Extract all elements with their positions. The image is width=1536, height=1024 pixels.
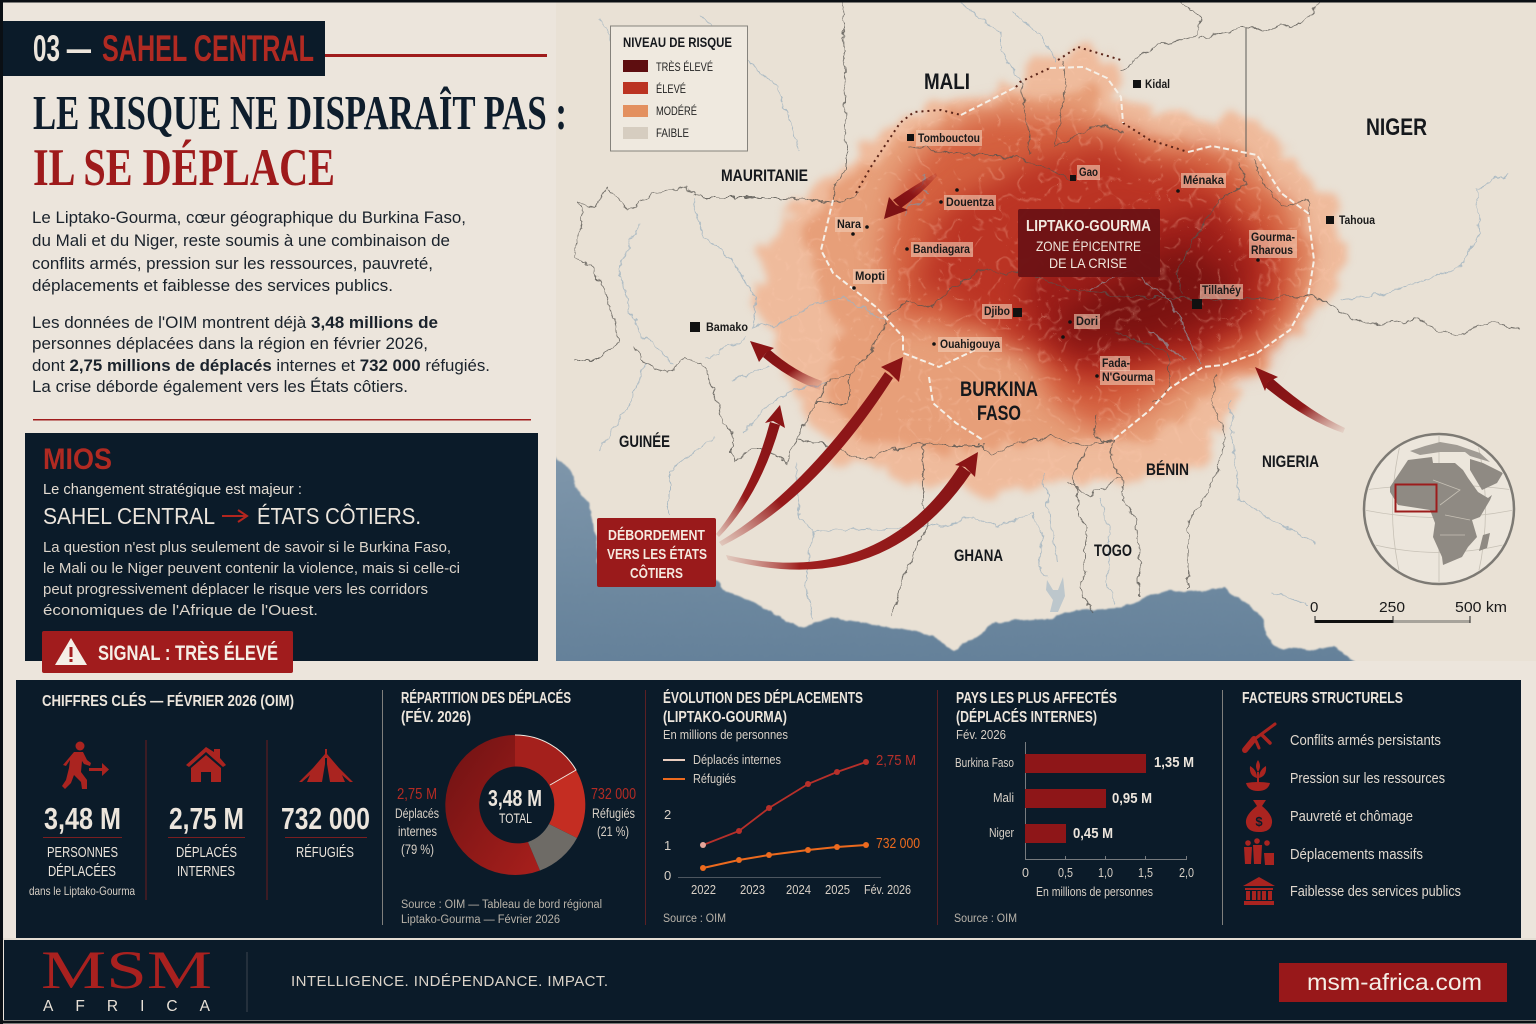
arrow: shift — [222, 510, 247, 522]
intro text: du Mali et du Niger, reste soumis à une combinaison de — [32, 232, 450, 250]
panel: MIOS: peut progressivement déplacer le risque vers les corridors — [43, 581, 428, 598]
panel: line chart: ÉVOLUTION DES DÉPLACEMENTS — [663, 688, 863, 707]
city labels: Ouahigouya — [940, 337, 1000, 351]
panel: MIOS: le Mali ou le Niger peuvent contenir la violence, mais si celle-ci — [43, 560, 460, 577]
panel: key figures: RÉFUGIÉS — [296, 844, 354, 861]
panel: line chart: Source : OIM — [663, 911, 726, 925]
interior rivers within risk zone — [905, 175, 1200, 365]
panel: bar chart: 0,45 M — [1073, 825, 1113, 842]
callout: Liptako-Gourma epicentre: ZONE ÉPICENTRE — [1036, 238, 1141, 254]
panel: key figures: DÉPLACÉES — [48, 863, 116, 880]
panel: line chart — [645, 688, 920, 925]
city labels: Kidal — [1145, 77, 1170, 91]
Liptako-Gourma boundary — [821, 47, 1314, 440]
country labels: GUINÉE — [619, 432, 670, 451]
panel: key figures: 2,75 M — [169, 801, 244, 836]
panel: bar chart: Source : OIM — [954, 911, 1017, 925]
icon: money bag — [1246, 800, 1272, 832]
panel: donut chart: RÉPARTITION DES DÉPLACÉS — [401, 688, 571, 707]
heat map: risk zones — [756, 47, 1346, 493]
panel: bar chart: 1,0 — [1098, 866, 1113, 880]
arrow: toward Burkina south — [726, 452, 978, 570]
panel: line chart: 2,75 M — [876, 752, 916, 769]
panel: bar chart: 1,35 M — [1154, 754, 1194, 771]
arrow: toward Burkina west — [719, 357, 903, 546]
panel: bar chart: 0,95 M — [1112, 790, 1152, 807]
website button — [1279, 963, 1507, 1002]
panel: line chart: 2022 — [691, 882, 716, 897]
scale bar — [1310, 599, 1507, 623]
panel: structural factors: Pression sur les ressources — [1290, 771, 1445, 787]
panel: donut chart: Déplacés — [395, 806, 439, 821]
icon: person walking — [62, 742, 109, 789]
panel: key figures — [29, 691, 370, 900]
country labels: TOGO — [1094, 541, 1132, 560]
rivers — [599, 3, 1508, 620]
panel: structural factors: Déplacements massifs — [1290, 847, 1423, 863]
panel: key figures: CHIFFRES CLÉS — FÉVRIER 2026 (OIM) — [42, 691, 294, 710]
country labels — [619, 69, 1427, 565]
logo: MSM Africa — [41, 940, 212, 1015]
country labels: BÉNIN — [1146, 460, 1189, 479]
panel: line chart: 2025 — [825, 882, 850, 897]
panel: line chart: 2023 — [740, 882, 765, 897]
country labels: FASO — [977, 402, 1021, 425]
callout: Liptako-Gourma epicentre: LIPTAKO-GOURMA — [1026, 218, 1151, 235]
city labels: Tahoua — [1339, 213, 1375, 227]
section tag: SAHEL CENTRAL — [102, 28, 314, 69]
panel: key figures: dans le Liptako-Gourma — [29, 884, 135, 898]
panel: line chart: Fév. 2026 — [864, 882, 911, 897]
sea — [556, 456, 1356, 661]
data text — [32, 314, 490, 396]
intro text: conflits armés, pression sur les ressources, pauvreté, — [32, 255, 433, 273]
panel: map — [556, 2, 1520, 661]
country labels: GHANA — [954, 546, 1003, 565]
city labels: Fada- — [1102, 356, 1130, 370]
legend: NIVEAU DE RISQUE — [623, 35, 732, 50]
locator globe — [1364, 434, 1514, 584]
icon: institution — [1243, 877, 1275, 905]
callout: overflow to coastal states — [597, 518, 716, 587]
footer — [4, 940, 1536, 1020]
callout: overflow to coastal states: DÉBORDEMENT — [608, 527, 705, 544]
panel: MIOS: SAHEL CENTRAL — [43, 503, 215, 529]
arrow: toward Guinea — [716, 405, 785, 537]
icon: house — [186, 747, 226, 782]
icon: plant — [1246, 760, 1270, 791]
country labels: NIGER — [1366, 114, 1427, 141]
signal badge — [42, 631, 293, 673]
panel: bar chart: Mali — [993, 791, 1014, 805]
series: refugees — [700, 842, 869, 871]
panel: key figures: 3,48 M — [44, 801, 121, 836]
legend: TRÈS ÉLEVÉ — [656, 59, 713, 74]
bars — [1025, 754, 1146, 843]
icon: people — [1244, 838, 1274, 865]
legend — [610, 26, 748, 151]
icon: money bag: $ — [1255, 814, 1263, 829]
scale bar: 250 — [1379, 599, 1405, 616]
panel: bar chart: Niger — [989, 826, 1014, 840]
panel: bar chart: En millions de personnes — [1036, 885, 1153, 899]
intro text: déplacements et faiblesse des services publics. — [32, 277, 393, 295]
arrow: toward Nara — [884, 173, 937, 219]
panel: bar chart: Burkina Faso — [955, 756, 1014, 770]
scale bar: 0 — [1310, 599, 1318, 616]
intro text — [32, 209, 466, 295]
panel: donut chart: 732 000 — [591, 786, 636, 803]
series: internally displaced — [700, 759, 869, 848]
panel: line chart: 732 000 — [876, 835, 920, 852]
legend: ÉLEVÉ — [656, 81, 686, 96]
icon: warning — [55, 638, 87, 665]
city labels: Tillahéy — [1202, 283, 1241, 297]
callout: Liptako-Gourma epicentre — [1018, 209, 1160, 277]
legend: MODÉRÉ — [656, 103, 697, 118]
city labels: Gao — [1079, 165, 1098, 179]
data text: La crise déborde également vers les États côtiers. — [32, 377, 408, 396]
panel: line chart: En millions de personnes — [663, 728, 788, 742]
country labels: BURKINA — [960, 378, 1038, 401]
arrow: from Nigeria — [1255, 367, 1345, 433]
panel: donut chart: (FÉV. 2026) — [401, 707, 471, 726]
city labels: Bandiagara — [913, 242, 970, 256]
panel: MIOS: économiques de l'Afrique de l'Ouest. — [43, 602, 318, 619]
panel: MIOS: La question n'est plus seulement de savoir si le Burkina Faso, — [43, 539, 451, 556]
panel: structural factors: Conflits armés persistants — [1290, 733, 1441, 749]
panel: bar chart: Fév. 2026 — [956, 728, 1006, 742]
section tag: 03 — — [33, 28, 91, 69]
data text: personnes déplacées dans la région en février 2026, — [32, 335, 428, 353]
panel: MIOS: MIOS — [43, 443, 112, 476]
donut — [445, 735, 585, 875]
panel: donut chart: Source : OIM — Tableau de bord régional — [401, 899, 602, 911]
panel: donut chart — [382, 688, 636, 926]
panel: bar chart: 2,0 — [1179, 866, 1194, 880]
arrow: toward Bamako — [750, 341, 822, 390]
panel: donut chart: 2,75 M — [397, 786, 437, 803]
callout: overflow to coastal states: VERS LES ÉTATS — [607, 546, 707, 563]
callout: Liptako-Gourma epicentre: DE LA CRISE — [1049, 255, 1127, 271]
title: IL SE DÉPLACE — [33, 139, 335, 197]
panel: key figures: 732 000 — [281, 801, 370, 836]
panel: statistics band — [16, 680, 1521, 938]
intro text: Le Liptako-Gourma, cœur géographique du Burkina Faso, — [32, 209, 466, 227]
data text: dont 2,75 millions de déplacés internes et 732 000 réfugiés. — [32, 357, 490, 375]
panel: MIOS — [25, 433, 538, 661]
lagoon — [1046, 577, 1065, 612]
website button: msm-africa.com — [1307, 969, 1482, 995]
logo: MSM Africa: AFRICA — [43, 998, 211, 1015]
panel: key figures: PERSONNES — [47, 845, 118, 861]
panel: line chart: 1 — [664, 838, 671, 853]
panel: key figures: DÉPLACÉS — [176, 844, 237, 861]
callout: overflow to coastal states: CÔTIERS — [630, 564, 683, 582]
panel: donut chart: TOTAL — [499, 811, 532, 826]
data text: Les données de l'OIM montrent déjà 3,48 millions de — [32, 314, 438, 332]
icon: rifle — [1245, 724, 1275, 750]
panel: donut chart: internes — [398, 824, 437, 839]
panel: line chart: Réfugiés — [693, 772, 736, 786]
panel: structural factors: FACTEURS STRUCTURELS — [1242, 690, 1403, 707]
country labels: NIGERIA — [1262, 452, 1319, 471]
panel: donut chart: Réfugiés — [592, 806, 635, 821]
title — [33, 85, 567, 197]
panel: donut chart: 3,48 M — [488, 785, 542, 811]
panel: structural factors: Faiblesse des services publics — [1290, 884, 1461, 900]
panel: line chart: 2024 — [786, 882, 811, 897]
country labels: MAURITANIE — [721, 166, 808, 185]
panel: line chart: 0 — [664, 868, 671, 883]
icon: tent — [299, 749, 353, 782]
panel: donut chart: (21 %) — [597, 824, 629, 839]
scale bar: 500 km — [1455, 599, 1507, 616]
panel: structural factors — [1222, 690, 1461, 925]
panel: line chart: 2 — [664, 807, 671, 822]
logo: MSM Africa: MSM — [41, 940, 212, 1000]
city labels: Nara — [837, 217, 861, 231]
legend: FAIBLE — [656, 126, 689, 140]
city labels: Rharous — [1251, 243, 1293, 257]
tagline: INTELLIGENCE. INDÉPENDANCE. IMPACT. — [291, 973, 608, 990]
panel: MIOS: Le changement stratégique est majeur : — [43, 482, 302, 498]
panel: structural factors: Pauvreté et chômage — [1290, 809, 1413, 825]
panel: line chart: Déplacés internes — [693, 753, 781, 767]
signal badge: SIGNAL : TRÈS ÉLEVÉ — [98, 642, 278, 665]
city labels: Gourma- — [1251, 230, 1295, 244]
country labels: MALI — [924, 69, 970, 94]
panel: bar chart: (DÉPLACÉS INTERNES) — [956, 707, 1097, 726]
panel: bar chart — [937, 688, 1194, 925]
title: LE RISQUE NE DISPARAÎT PAS : — [33, 85, 567, 140]
city labels: Djibo — [984, 304, 1010, 318]
panel: MIOS: ÉTATS CÔTIERS. — [257, 502, 421, 529]
city labels: Dori — [1076, 314, 1098, 328]
city labels: Tombouctou — [918, 131, 980, 145]
city labels: Mopti — [855, 269, 885, 283]
panel: bar chart: 0 — [1022, 866, 1029, 880]
panel: donut chart: (79 %) — [401, 842, 434, 857]
country borders — [573, 0, 1518, 617]
city labels: N'Gourma — [1102, 370, 1153, 384]
city labels: Douentza — [946, 195, 994, 209]
city labels — [690, 77, 1375, 385]
panel: bar chart: 0,5 — [1058, 866, 1073, 880]
section tag — [2, 21, 547, 76]
city labels: Ménaka — [1183, 173, 1224, 187]
panel: line chart: (LIPTAKO-GOURMA) — [663, 709, 787, 726]
panel: key figures: INTERNES — [177, 864, 235, 880]
panel: bar chart: PAYS LES PLUS AFFECTÉS — [956, 688, 1117, 707]
panel: donut chart: Liptako-Gourma — Février 2026 — [401, 914, 560, 926]
city labels: Bamako — [706, 320, 748, 334]
panel: bar chart: 1,5 — [1138, 866, 1153, 880]
